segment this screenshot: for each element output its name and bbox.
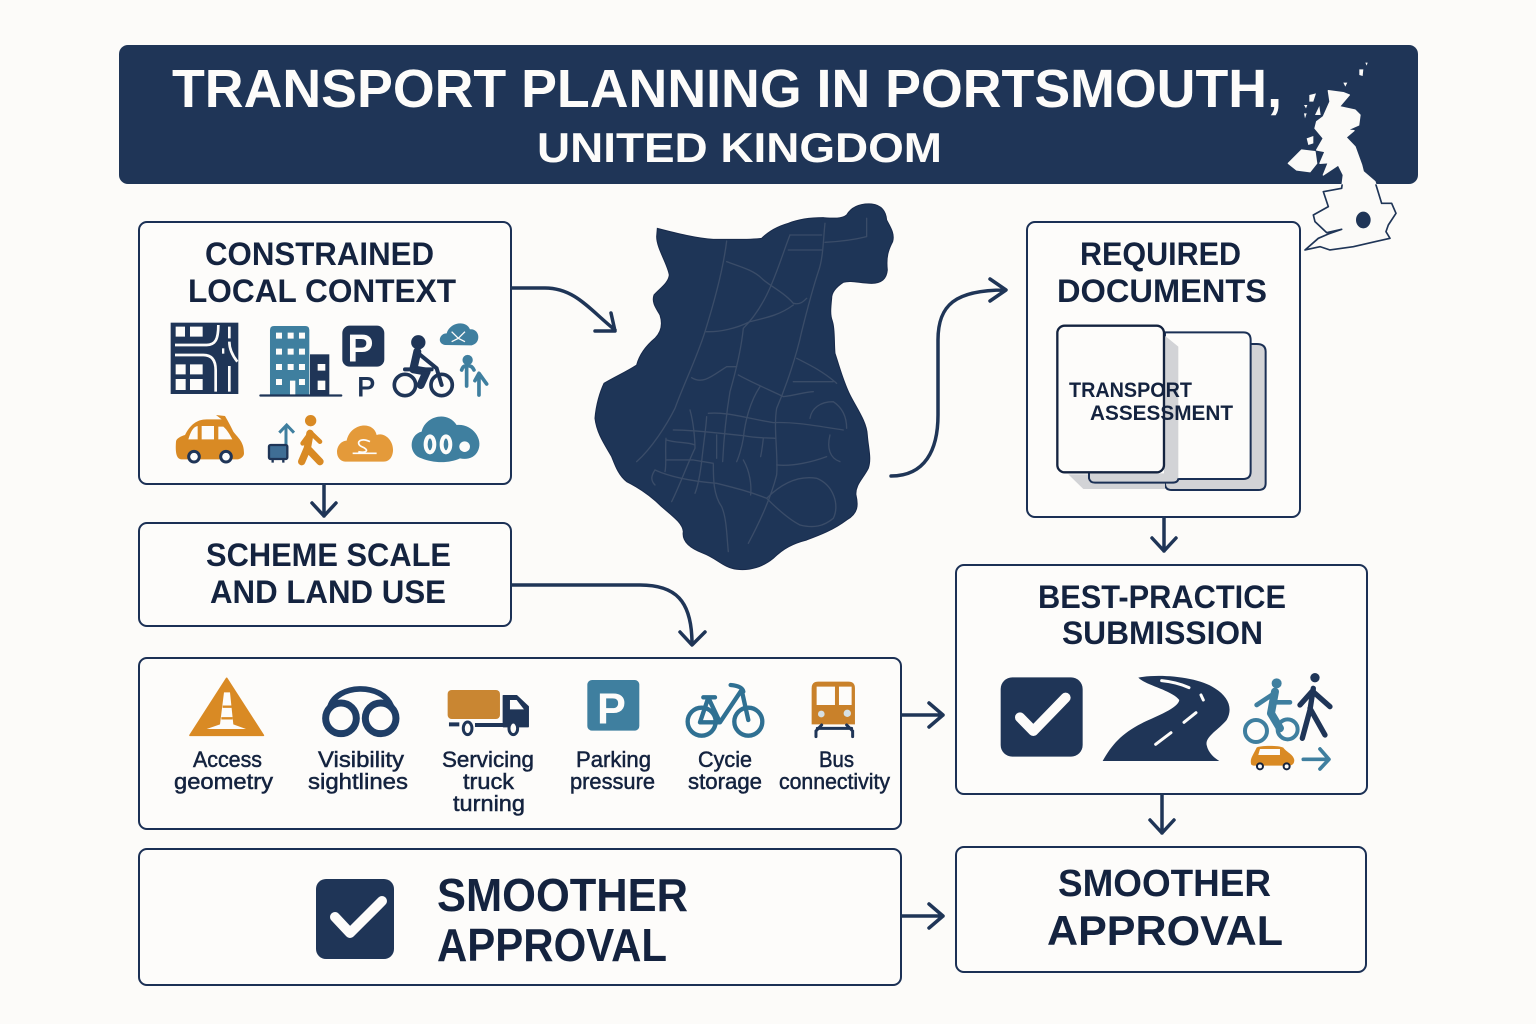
item: parking pressure: Parking: [576, 747, 651, 772]
icon: check box: [1001, 677, 1083, 757]
icon: orange car: [176, 415, 244, 462]
icon: arrow and luggage: [269, 425, 294, 463]
panel: smoother approval (left): [139, 849, 901, 985]
heading: best-practice submission: SUBMISSION: [1062, 615, 1263, 651]
heading: smoother approval: APPROVAL: [1047, 907, 1283, 954]
heading: required documents: REQUIRED: [1080, 236, 1241, 272]
infographic canvas: [119, 45, 1418, 986]
heading: smoother approval: APPROVAL: [437, 919, 667, 971]
label: transport assessment: [1069, 379, 1233, 425]
item: parking pressure: pressure: [570, 769, 655, 794]
item: cycle storage: storage: [688, 769, 762, 794]
heading: smoother approval: SMOOTHER: [437, 869, 688, 921]
title line 1: TRANSPORT PLANNING IN PORTSMOUTH,: [172, 59, 1282, 119]
icon: teal arrow: [1303, 749, 1329, 769]
item: parking pressure: [570, 680, 655, 794]
heading: scheme scale: [206, 537, 451, 610]
item: bus connectivity: Bus: [819, 747, 854, 772]
heading: smoother approval: [437, 869, 688, 971]
icon: parking sign: P: [357, 372, 375, 402]
icon: orange pedestrian: [302, 415, 320, 462]
panel: smoother approval (right): [956, 847, 1366, 972]
heading: scheme scale: SCHEME SCALE: [206, 537, 451, 573]
item: bus connectivity: connectivity: [779, 769, 890, 794]
road network: [637, 218, 867, 552]
icons: local context: [171, 323, 487, 463]
item: parking pressure: P: [597, 685, 626, 733]
panel: site considerations: [139, 658, 901, 829]
icon: teal cloud: [412, 417, 479, 462]
arrow: approval to approval: [902, 904, 943, 928]
title banner: [119, 45, 1418, 184]
arrow: considerations to submission: [902, 703, 943, 727]
title line 2: UNITED KINGDOM: [537, 124, 942, 171]
arrow: context to scheme scale: [312, 485, 336, 516]
item: bus connectivity: [779, 682, 890, 794]
heading: required documents: [1057, 236, 1267, 309]
item: access geometry: geometry: [174, 769, 273, 794]
arrow: context to map: [512, 288, 615, 331]
icon: UK map: [1288, 63, 1396, 250]
arrow: documents to submission: [1152, 518, 1176, 551]
panel: required documents: [1027, 222, 1300, 517]
heading: constrained local context: CONSTRAINED: [205, 236, 434, 272]
item: visibility sightlines: sightlines: [308, 769, 408, 794]
item: servicing truck turning: turning: [453, 791, 525, 816]
panel: scheme scale and land use: [139, 523, 511, 626]
item: visibility sightlines: Visibility: [318, 747, 404, 772]
item: servicing truck turning: truck: [463, 769, 515, 794]
panel: best-practice submission: [956, 565, 1367, 794]
icon: document stack: [1057, 326, 1266, 490]
heading: constrained local context: LOCAL CONTEXT: [188, 273, 456, 309]
icon: parking sign: P: [347, 328, 373, 371]
heading: best-practice submission: BEST-PRACTICE: [1038, 579, 1286, 615]
map: Portsmouth silhouette: [595, 204, 893, 570]
label: transport assessment: TRANSPORT: [1069, 379, 1192, 402]
item: servicing truck turning: Servicing: [442, 747, 534, 772]
arrow: scheme scale to considerations: [512, 585, 705, 645]
item: servicing truck turning: [442, 690, 534, 816]
icons: submission: [1001, 673, 1330, 769]
panel: constrained local context: [139, 222, 511, 484]
icon: check box: [316, 879, 394, 959]
icon: cyclist and walker: [1245, 673, 1330, 742]
icon: winding road: [1103, 676, 1230, 761]
label: transport assessment: ASSESSMENT: [1090, 402, 1233, 425]
heading: constrained local context: [188, 236, 456, 309]
item: access geometry: Access: [193, 747, 262, 772]
icon: buildings: [259, 326, 342, 397]
item: visibility sightlines: [308, 689, 408, 794]
icon: orange cloud: [337, 425, 393, 462]
icon: small car: [1251, 746, 1294, 769]
icon: parking sign: [342, 326, 384, 402]
heading: required documents: DOCUMENTS: [1057, 273, 1267, 309]
heading: scheme scale: AND LAND USE: [210, 574, 446, 610]
icon: cyclist: [394, 337, 452, 396]
item: access geometry: [174, 678, 273, 794]
icon: street grid: [171, 323, 238, 394]
icon: small teal cloud: [440, 323, 478, 345]
heading: smoother approval: [1047, 863, 1283, 954]
arrow: map to documents: [891, 279, 1006, 476]
icon: teal pedestrians: [462, 357, 487, 395]
item: cycle storage: Cycie: [698, 747, 752, 772]
item: cycle storage: [688, 685, 762, 794]
arrow: submission to approval: [1150, 795, 1174, 833]
heading: best-practice submission: [1038, 579, 1286, 651]
heading: smoother approval: SMOOTHER: [1058, 863, 1271, 905]
